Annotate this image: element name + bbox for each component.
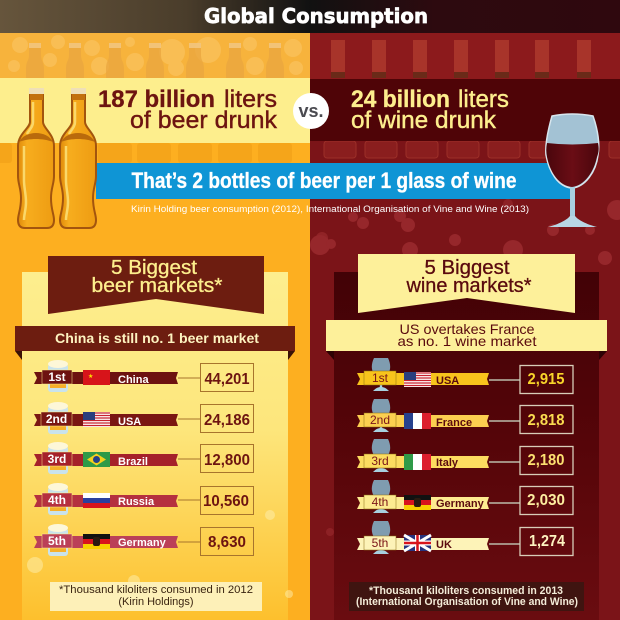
wine row 4: Germany	[357, 480, 573, 514]
wine row 3: Italy: 2,180	[528, 452, 565, 469]
wine row 2: France: France	[436, 417, 472, 429]
wine row 2: France: 2,818	[528, 412, 565, 429]
wine row 1: USA: 1st	[372, 371, 389, 385]
beer row 4: Russia: 10,560	[203, 493, 249, 510]
bottle bottoms under the wine band	[324, 141, 620, 158]
beer footnote: (Kirin Holdings)	[118, 596, 194, 608]
wine row 1: USA: 2,915	[528, 371, 565, 388]
wine row 1: USA: USA	[436, 375, 459, 387]
beer markets ribbon: beer markets*	[92, 275, 223, 297]
wine row 5: UK: 1,274	[529, 533, 565, 550]
beer row 1: China	[34, 360, 254, 392]
wine footnote: (International Organisation of Vine and Wine)	[356, 596, 578, 608]
wine stat: liters	[458, 86, 509, 113]
background: wine side	[310, 33, 620, 620]
beer headline band	[0, 78, 310, 143]
vs badge: vs.	[298, 101, 324, 121]
beer row 5: Germany: 5th	[48, 534, 66, 548]
beer row 4: Russia: Russia	[118, 496, 155, 508]
wine row 3: Italy: 3rd	[371, 454, 389, 468]
bottle bottoms under the beer band	[0, 143, 292, 163]
wine subtitle banner	[326, 320, 607, 360]
blue comparison banner	[96, 163, 570, 199]
wine row 3: Italy: Italy	[436, 457, 459, 469]
beer footnote	[50, 582, 262, 611]
beer panel bubbles	[27, 510, 293, 598]
wine row 1: USA	[357, 358, 573, 394]
wine row 4: Germany: 2,030	[527, 492, 565, 509]
beer subtitle banner: China is still no. 1 beer market	[55, 330, 259, 346]
beer row 5: Germany: Germany	[118, 537, 167, 549]
wine stat	[351, 86, 509, 134]
beer row 5: Germany: 8,630	[208, 534, 246, 551]
beer markets ribbon	[48, 256, 264, 314]
wine headline band	[310, 79, 620, 141]
beer markets ribbon: 5 Biggest	[111, 257, 197, 279]
beer row 2: USA: USA	[118, 416, 141, 428]
wine panel	[334, 272, 599, 620]
beer row 5: Germany	[34, 524, 254, 556]
wine markets ribbon	[358, 254, 575, 313]
icon: wine glass	[546, 114, 599, 227]
beer row 1: China: 44,201	[204, 371, 250, 388]
icon: beer bottle 2	[60, 88, 96, 228]
beer row 2: USA	[34, 402, 254, 434]
source line: Kirin Holding beer consumption (2012), International Organisation of Vine and Wine (2013)	[131, 204, 529, 214]
beer stat: liters	[224, 86, 277, 113]
wine stat: of wine drunk	[351, 107, 497, 134]
wine row 5: UK	[357, 521, 573, 556]
beer stat: of beer drunk	[130, 107, 278, 134]
beer stat: 187 billion	[98, 86, 215, 113]
wine footnote: *Thousand kiloliters consumed in 2013	[369, 585, 563, 597]
title: Global Consumption	[204, 4, 428, 28]
wine markets ribbon: wine markets*	[406, 275, 532, 297]
wine row 5: UK: 5th	[372, 536, 388, 550]
wine background band with bottles	[310, 33, 620, 79]
background: beer side	[0, 33, 310, 620]
blue comparison banner: That’s 2 bottles of beer per 1 glass of wine	[132, 168, 516, 193]
beer stat	[98, 86, 278, 134]
beer row 4: Russia	[34, 483, 254, 515]
beer panel	[22, 272, 288, 620]
header bar	[0, 0, 620, 33]
wine row 4: Germany: Germany	[436, 498, 485, 510]
beer row 4: Russia: 4th	[48, 493, 66, 507]
wine footnote	[349, 582, 584, 611]
beer row 1: China: China	[118, 374, 149, 386]
icon: beer bottle 1	[18, 88, 54, 228]
wine row 2: France: 2nd	[370, 413, 390, 427]
wine stat: 24 billion	[351, 86, 450, 113]
beer row 3: Brazil: Brazil	[118, 456, 148, 468]
wine subtitle banner: US overtakes France	[400, 321, 535, 337]
beer subtitle banner	[15, 326, 295, 360]
vs badge	[293, 93, 329, 129]
beer row 1: China: 1st	[48, 370, 66, 384]
beer footnote: *Thousand kiloliters consumed in 2012	[59, 584, 253, 596]
wine markets ribbon: 5 Biggest	[424, 257, 510, 279]
beer row 2: USA: 2nd	[46, 412, 67, 426]
beer row 1: China: ★	[88, 373, 93, 380]
wine row 5: UK: UK	[436, 539, 452, 551]
beer row 3: Brazil: 3rd	[48, 452, 66, 466]
wine row 4: Germany: 4th	[372, 495, 388, 509]
beer row 3: Brazil: 12,800	[204, 452, 250, 469]
wine row 2: France	[357, 399, 573, 434]
beer background band with bubbles and bottles	[0, 33, 310, 79]
beer row 2: USA: 24,186	[204, 412, 250, 429]
wine subtitle banner: as no. 1 wine market	[398, 333, 537, 349]
beer row 3: Brazil	[34, 442, 254, 474]
wine row 3: Italy	[357, 439, 573, 474]
wine bubbles	[310, 199, 620, 583]
